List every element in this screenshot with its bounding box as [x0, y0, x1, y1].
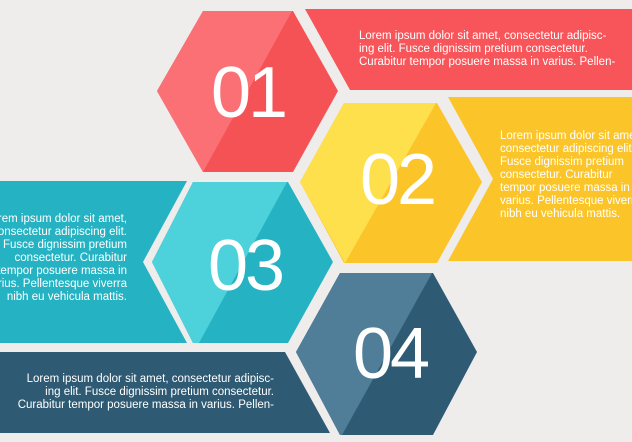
text: 04: Curabitur tempor posuere massa in varius. Pellen-: [18, 399, 274, 411]
hexagon 04: [296, 273, 477, 435]
banner: 01 red: [305, 9, 632, 90]
hexagon 02: 02: [360, 140, 434, 220]
text: 03: nibh eu vehicula mattis.: [7, 291, 127, 303]
hexagon 03: [152, 182, 333, 343]
text: 02: tempor posuere massa in: [500, 182, 630, 194]
hexagon 01: 01: [211, 53, 285, 133]
hexagon 01: [157, 11, 338, 172]
hexagon 02: [300, 103, 482, 263]
hexagon 03: 03: [208, 226, 282, 306]
text: 02: consectetur. Curabitur: [500, 169, 613, 181]
text: 02: Fusce dignissim pretium: [500, 156, 624, 168]
text: 01: ing elit. Fusce dignissim pretium consectetur.: [359, 43, 588, 55]
text: 01: Curabitur tempor posuere massa in varius. Pellen-: [359, 56, 615, 68]
banner: 02 yellow: [448, 97, 632, 261]
text: 02: consectetur adipiscing elit.: [500, 143, 632, 155]
banner: 04 navy: [0, 352, 330, 433]
text: 04: ing elit. Fusce dignissim pretium consectetur.: [45, 386, 274, 398]
text: 03: consectetur. Curabitur: [14, 252, 127, 264]
text: 03: Fusce dignissim pretium: [3, 239, 127, 251]
text: 01: Lorem ipsum dolor sit amet, consectetur adipisc-: [359, 30, 607, 42]
banner: 03 teal: [0, 181, 187, 343]
hexagon 04: 04: [353, 314, 428, 394]
text: 02: nibh eu vehicula mattis.: [500, 208, 620, 220]
text: 04: Lorem ipsum dolor sit amet, consectetur adipisc-: [27, 373, 274, 385]
text: 03: tempor posuere massa in: [0, 265, 127, 277]
